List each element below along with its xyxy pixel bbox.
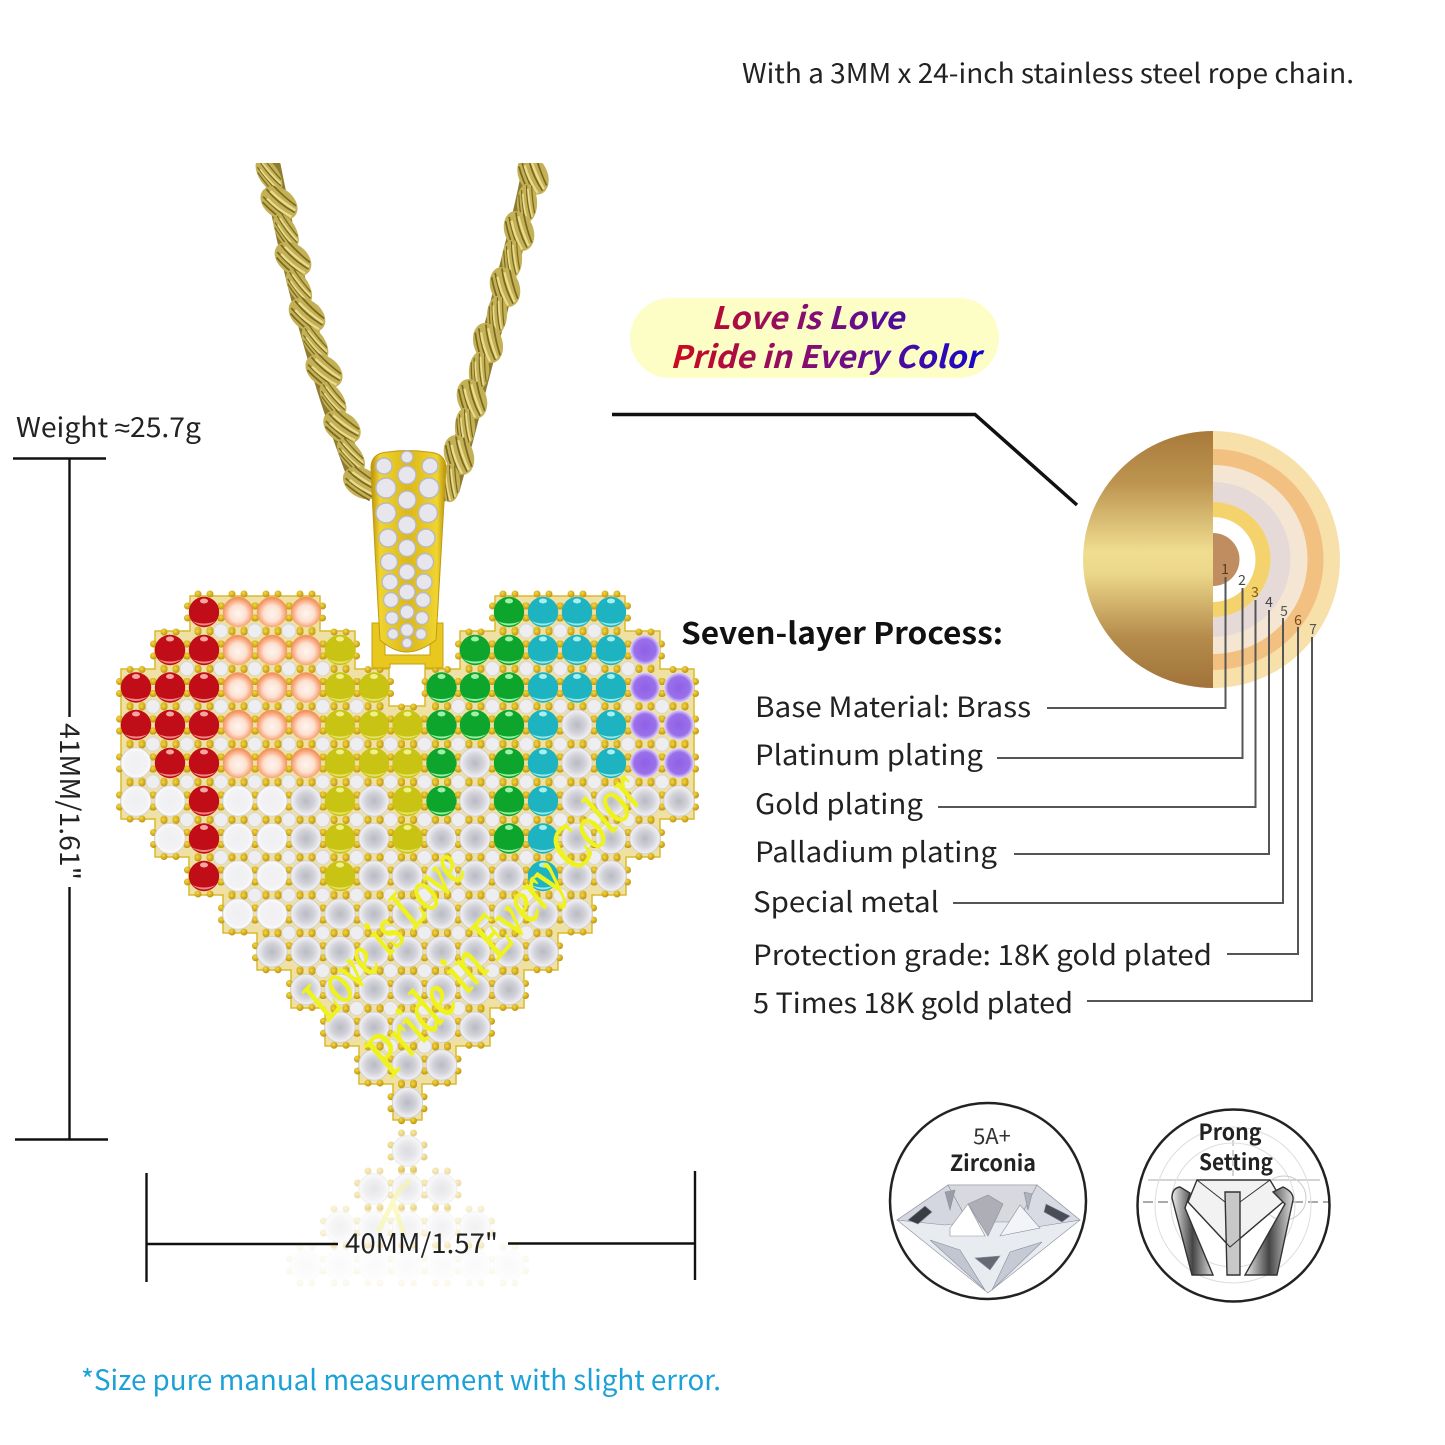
row 6 xyxy=(116,780,699,822)
width label: 40MM/1.57" xyxy=(345,1222,498,1261)
row 4 xyxy=(116,704,699,746)
layer numbers: 5 xyxy=(1280,601,1288,621)
process labels: Platinum plating xyxy=(755,734,983,774)
row 12 xyxy=(320,1006,495,1049)
slogan line 1: Love is Love xyxy=(711,293,907,338)
height dimension lines xyxy=(13,458,108,1140)
icon: diamond xyxy=(897,1185,1080,1293)
badge: 5A+ Zirconia xyxy=(890,1103,1086,1299)
width dimension lines xyxy=(146,1171,695,1282)
small accent stones xyxy=(145,623,670,1054)
bail connector xyxy=(372,623,443,668)
blueprint guide lines xyxy=(1143,1127,1328,1283)
badge caption bold: Setting xyxy=(1199,1145,1273,1177)
row 10 xyxy=(252,930,563,973)
rope chain xyxy=(256,163,549,502)
plating rings xyxy=(1213,431,1340,688)
layer numbers xyxy=(1221,559,1317,639)
slogan badge xyxy=(630,293,999,378)
process labels xyxy=(753,686,1212,1022)
height label: 41MM/1.61" xyxy=(52,723,91,880)
seven-layer cross-section xyxy=(1083,431,1340,688)
layer numbers: 2 xyxy=(1238,570,1246,590)
row 8 xyxy=(184,854,631,898)
row 3 xyxy=(116,666,699,709)
process labels: Protection grade: 18K gold plated xyxy=(753,934,1212,974)
process labels: Special metal xyxy=(753,881,939,921)
chain note text: With a 3MM x 24-inch stainless steel rope chain. xyxy=(742,52,1354,91)
row 13 xyxy=(354,1044,462,1086)
badge ring xyxy=(1138,1110,1330,1302)
gem rows xyxy=(116,590,699,1124)
pave bail xyxy=(371,450,446,652)
row 5 xyxy=(116,742,699,784)
engraved script: Love is Love: Love is Love xyxy=(289,836,477,1031)
leader lines xyxy=(938,577,1312,1001)
process heading: Seven-layer Process: xyxy=(681,609,1003,653)
mirror reflection of pendant tip xyxy=(286,1130,529,1286)
slogan line 2: Pride in Every Color xyxy=(670,332,985,377)
badge caption: 5A+ xyxy=(973,1119,1011,1151)
row 2 xyxy=(150,628,665,672)
layer numbers: 1 xyxy=(1221,559,1229,579)
weight label: Weight ≈25.7g xyxy=(16,406,201,445)
engraved script: Pride in Every Color: Pride in Every Color xyxy=(349,757,657,1088)
pendant necklace xyxy=(116,147,699,1287)
process labels: Base Material: Brass xyxy=(755,686,1031,726)
badge: Prong Setting xyxy=(1138,1110,1330,1302)
measurement footnote: *Size pure manual measurement with slight error. xyxy=(81,1359,721,1399)
icon: diamond in prongs xyxy=(1172,1180,1293,1275)
layer numbers: 6 xyxy=(1294,610,1302,630)
process labels: Palladium plating xyxy=(755,831,997,871)
badge ring xyxy=(890,1103,1086,1299)
bail body xyxy=(371,450,446,652)
right rope strand xyxy=(444,163,549,502)
layer numbers: 7 xyxy=(1309,619,1317,639)
slogan pill xyxy=(630,298,999,378)
badge caption: Prong xyxy=(1198,1115,1262,1147)
process labels: 5 Times 18K gold plated xyxy=(753,982,1073,1022)
callout pointer line xyxy=(612,414,1077,505)
row 1 xyxy=(184,590,631,634)
bail stones xyxy=(376,451,439,648)
layer numbers: 3 xyxy=(1251,582,1259,602)
heart pendant xyxy=(116,590,699,1124)
left rope strand xyxy=(256,163,372,502)
row 9 xyxy=(218,892,597,936)
row 11 xyxy=(286,968,529,1011)
badge caption bold: Zirconia xyxy=(950,1146,1036,1178)
brass half sphere xyxy=(1083,431,1213,688)
row 7 xyxy=(150,817,665,860)
gold heart plate xyxy=(121,596,694,1120)
layer numbers: 4 xyxy=(1265,592,1273,612)
row 14 xyxy=(388,1081,428,1124)
process labels: Gold plating xyxy=(755,783,923,823)
